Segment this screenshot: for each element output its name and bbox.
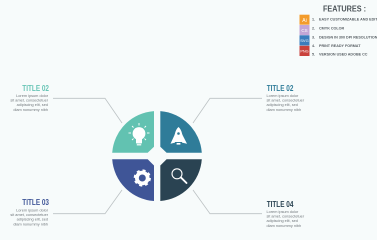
segment: bottom right navy [160, 159, 202, 201]
icon: gear [135, 170, 150, 186]
text block: bottom right [266, 200, 305, 228]
body: top right text: Lorem ipsum dolor [266, 94, 299, 98]
icon: light bulb [128, 123, 150, 145]
connector: top right [193, 98, 262, 123]
body: top left text: Lorem ipsum dolor [16, 94, 49, 98]
feature 5: VERSION USED ADOBE CC [319, 53, 368, 57]
body: bottom left text: sit amet, consectetuer [10, 213, 49, 217]
connector: bottom left [53, 190, 122, 214]
icon: rocket [170, 127, 187, 145]
feature 3: 3. [312, 35, 315, 39]
heading: top right title: TITLE 02 [267, 84, 294, 93]
body: top right text: sit amet, consectetuer [266, 99, 305, 103]
icon: SVG badge [300, 35, 310, 46]
text block: top right [266, 84, 305, 112]
feature 2: 2. [312, 27, 315, 31]
body: bottom left text: adipiscing elit, sed [17, 218, 48, 222]
body: top left text: sit amet, consectetuer [10, 99, 49, 103]
feature 3: DESIGN IN 300 DPI RESOLUTION [319, 35, 377, 39]
text block: top left [10, 84, 49, 112]
feature 1: 1. [312, 18, 315, 22]
body: bottom right text: sit amet, consectetuer [266, 215, 305, 219]
feature 2: CMYK COLOR [319, 27, 345, 31]
heading: features: FEATURES : [323, 4, 366, 14]
icon: Ai badge [300, 15, 310, 25]
icon: Ai badge: Ai [302, 18, 307, 24]
icon: magnifier [172, 169, 186, 183]
icon: CS badge: CS [301, 28, 308, 33]
feature list [312, 18, 377, 57]
heading: bottom left title: TITLE 03 [22, 198, 49, 207]
segment: bottom left indigo [112, 159, 154, 201]
body: top left text: adipiscing elit, sed [17, 103, 48, 107]
body: top right text: diam nonummy nibh [266, 108, 301, 112]
text block: bottom left [10, 198, 49, 226]
icon: SVG badge: SVG [300, 38, 309, 43]
body: bottom left text: diam nonummy nibh [13, 222, 48, 226]
connector: top left [53, 98, 122, 123]
body: top left text: diam nonummy nibh [13, 108, 48, 112]
segment: top right blue [160, 111, 202, 153]
feature 4: PRINT READY FORMAT [319, 44, 361, 48]
icon: PNG badge [300, 46, 310, 56]
body: bottom right text: diam nonummy nibh [266, 224, 301, 228]
body: bottom left text: Lorem ipsum dolor [16, 208, 49, 212]
feature 4: 4. [312, 44, 315, 48]
icon: PNG badge: PNG [300, 50, 309, 54]
icon: CS badge [300, 25, 310, 35]
body: bottom right text: adipiscing elit, sed [266, 219, 298, 223]
heading: top left title: TITLE 02 [22, 84, 49, 93]
feature 5: 5. [312, 53, 315, 57]
segment: top left teal [112, 111, 154, 153]
connector: bottom right [193, 190, 262, 214]
body: bottom right text: Lorem ipsum dolor [266, 210, 299, 214]
heading: bottom right title: TITLE 04 [267, 200, 294, 209]
body: top right text: adipiscing elit, sed [266, 103, 298, 107]
